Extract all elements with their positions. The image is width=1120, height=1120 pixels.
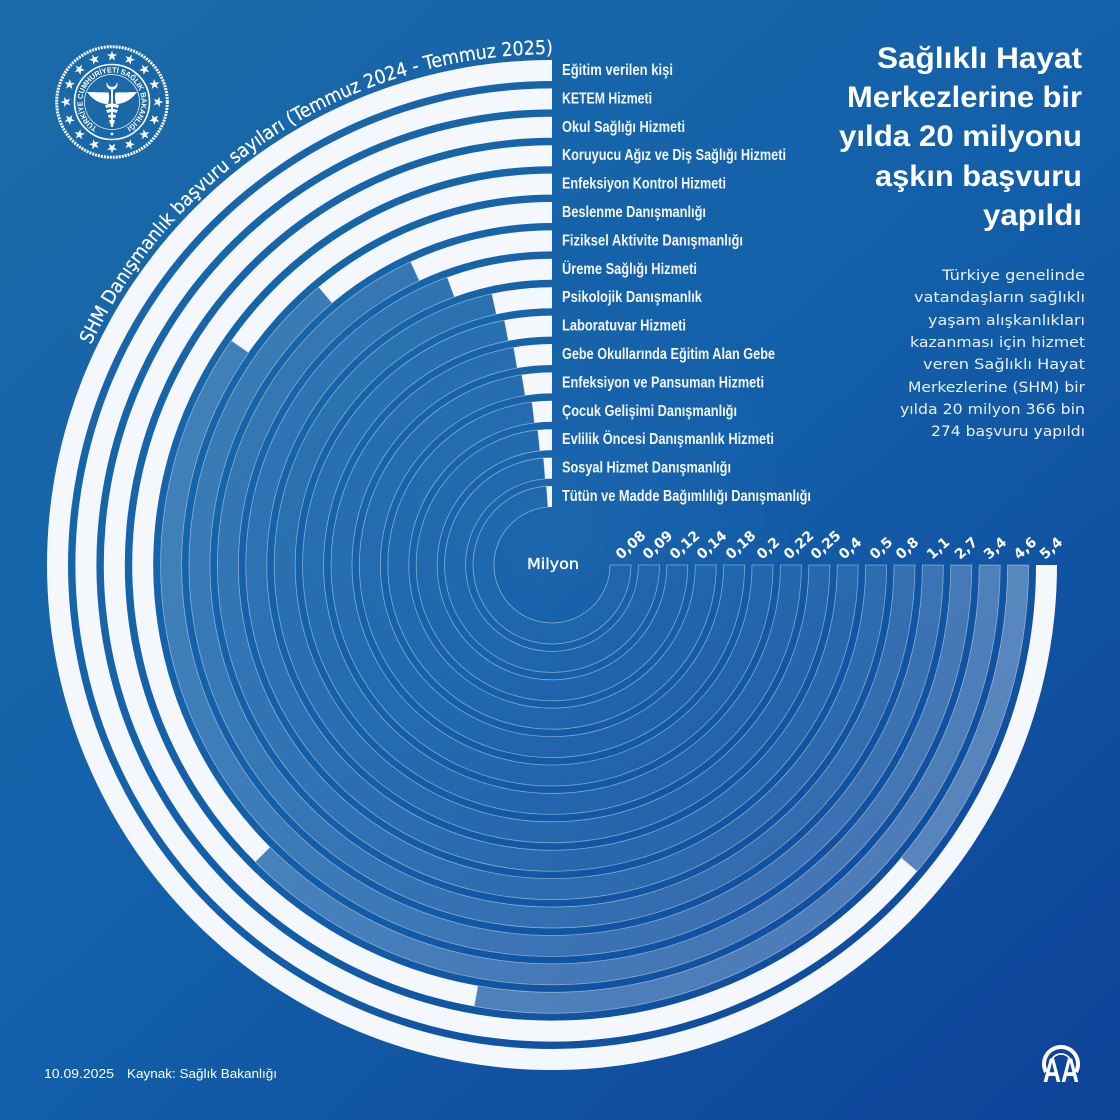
value labels in millions: 5,4 [1037,534,1066,563]
description text: Türkiye genelinde [941,268,1085,284]
ring: Üreme Sağlığı 0,4 [246,259,858,871]
service labels: Laboratuvar Hizmeti [562,318,686,335]
ring: Beslenme 0,8 [189,202,915,928]
value labels in millions: 1,1 [924,534,953,563]
service labels: Üreme Sağlığı Hizmeti [562,259,697,278]
service labels: Koruyucu Ağız ve Diş Sağlığı Hizmeti [562,147,786,164]
value labels in millions: 0,12 [667,528,703,563]
service labels: Psikolojik Danışmanlık [562,289,702,306]
service labels: Sosyal Hizmet Danışmanlığı [562,460,731,477]
service labels: Gebe Okullarında Eğitim Alan Gebe [562,346,775,363]
service labels: Okul Sağlığı Hizmeti [562,119,685,136]
service labels: KETEM Hizmeti [562,90,652,107]
ring: Evlilik Öncesi 0,12 [416,429,688,701]
value labels in millions: 0,22 [781,528,817,563]
description text: kazanması için hizmet [910,335,1085,351]
value labels in millions: 0,14 [694,528,731,563]
value labels in millions: 0,5 [867,534,896,563]
ministry emblem [55,45,169,159]
curved chart title: SHM Danışmanlık başvuru sayıları (Temmuz 2024 - Temmuz 2025) [80,40,552,344]
service labels: Evlilik Öncesi Danışmanlık Hizmeti [562,429,774,448]
value labels in millions [613,528,1066,563]
value labels in millions: 2,7 [952,534,981,563]
value labels in millions: 0,25 [808,528,844,563]
ring: Tütün ve Madde 0,08 [473,486,631,644]
value labels in millions: 0,09 [640,528,676,563]
ring: KETEM 4,6 [75,88,1029,1042]
description text: yaşam alışkanlıkları [928,313,1085,329]
footer date and source [44,1067,277,1081]
service labels: Tütün ve Madde Bağımlılığı Danışmanlığı [562,488,811,505]
value labels in millions: 0,8 [893,534,922,563]
description text: veren Sağlıklı Hayat [923,357,1085,373]
value labels in millions: 3,4 [981,534,1010,563]
ring: Enfeksiyon ve Pansuman 0,18 [359,372,745,758]
ring: Laboratuvar 0,22 [303,316,801,814]
ring: Psikolojik 0,25 [274,287,830,843]
service labels: Eğitim verilen kişi [562,62,673,79]
title: yapıldı [983,199,1082,232]
footer date and source: 10.09.2025 [44,1067,114,1081]
ring: Fiziksel Aktivite 0,5 [217,230,887,900]
logo: AA [1043,1047,1079,1090]
logo: AA: AA [1043,1052,1079,1090]
ministry emblem: TÜRKİYE CUMHURİYETİ SAĞLIK BAKANLIĞI [77,66,147,132]
footer date and source: Kaynak: Sağlık Bakanlığı [127,1067,277,1081]
title: yılda 20 milyonu [839,120,1082,153]
title: Sağlıklı Hayat [877,42,1082,75]
description text: vatandaşların sağlıklı [914,290,1085,306]
value labels in millions: 0,2 [754,534,783,563]
unit label: Milyon [527,555,579,573]
value labels in millions: 0,08 [613,528,649,563]
value labels in millions: 0,4 [836,534,865,563]
ring: Sosyal Hizmet 0,09 [445,458,659,672]
ring: Gebe Okulları 0,2 [331,344,773,786]
service labels: Beslenme Danışmanlığı [562,204,706,221]
ring: Okul Sağlığı 3,4 [104,117,1000,1013]
service labels: Enfeksiyon Kontrol Hizmeti [562,176,726,193]
ring: Çocuk Gelişimi 0,14 [388,401,716,729]
title [839,42,1082,232]
ring: Enfeksiyon Kontrol 1,1 [161,174,943,956]
title: aşkın başvuru [875,160,1082,193]
ring: Koruyucu Ağız ve Diş 2,7 [132,145,972,985]
service labels: Çocuk Gelişimi Danışmanlığı [562,403,737,420]
description text: 274 başvuru yapıldı [931,424,1085,440]
description text: Merkezlerine (SHM) bir [908,380,1085,396]
value labels in millions: 0,18 [723,528,759,563]
description text [900,268,1085,440]
service labels: Enfeksiyon ve Pansuman Hizmeti [562,374,764,391]
value labels in millions: 4,6 [1011,534,1040,563]
service labels: Fiziksel Aktivite Danışmanlığı [562,232,743,249]
service labels [562,62,811,505]
description text: yılda 20 milyon 366 bin [900,402,1085,418]
title: Merkezlerine bir [847,81,1082,114]
